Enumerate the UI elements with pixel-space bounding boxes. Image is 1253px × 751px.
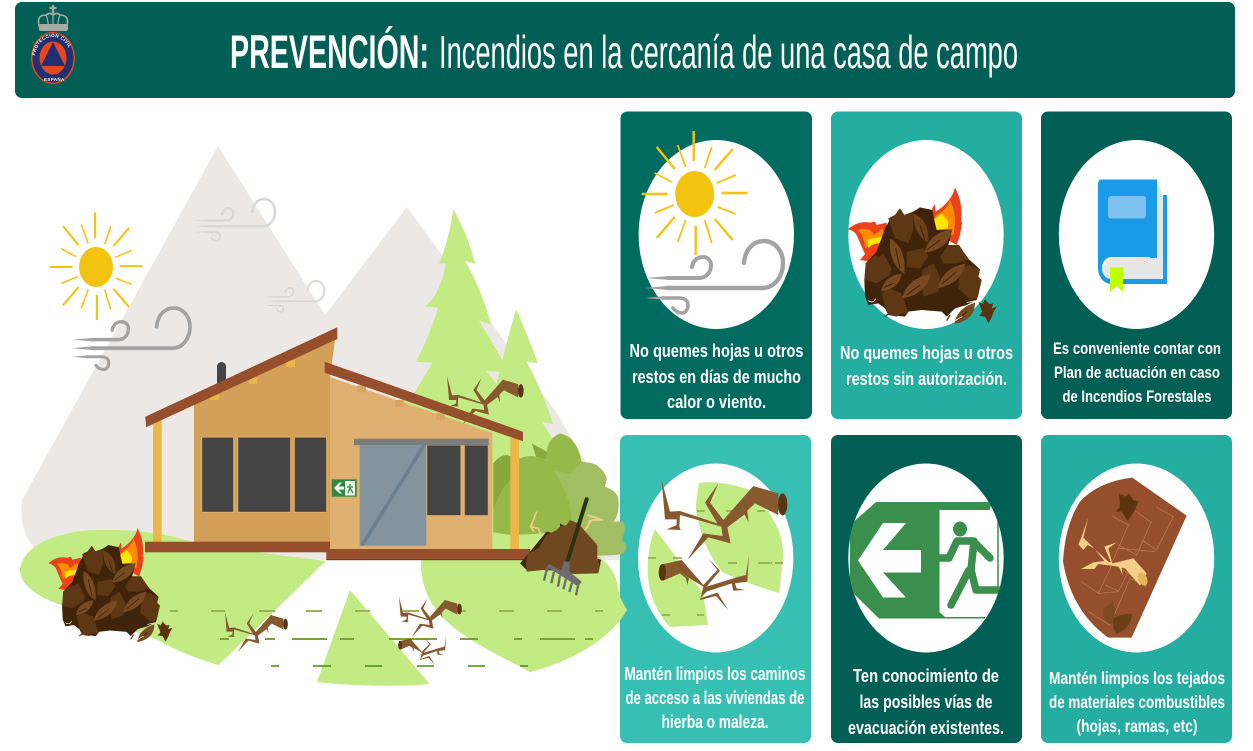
scene: country house illustration [20,146,627,686]
branches on roof [447,376,524,425]
icon: sun [642,131,748,255]
compost pile with rake [520,499,603,595]
text: (hojas, ramas, etc) [1076,716,1198,736]
logo: Protección Civil España [31,5,75,84]
text [1053,339,1221,406]
icon: exit sign [850,502,998,618]
card 6: clean roofs [1041,435,1232,743]
trees [400,209,560,545]
mountains [21,146,620,560]
text: Ten conocimiento de [853,665,999,686]
text: restos sin autorización. [846,368,1007,389]
icon: wind [645,241,783,313]
text [840,342,1013,389]
icon: faint wind left [195,199,275,241]
text: las posibles vías de [860,691,992,712]
icon: faint wind right [265,281,324,312]
icon: sun [50,212,142,320]
header banner [15,2,1235,98]
icon: branches [659,480,787,610]
branches on path left [225,612,288,652]
text [624,663,806,732]
logo: Protección Civil España: ESPAÑA [44,76,65,82]
branches on path right bottom [398,636,446,665]
title: PREVENCIÓN: [230,25,429,78]
ground: grass [20,530,627,686]
bushes [493,433,626,557]
path dashes [170,611,603,666]
text: de Incendios Forestales [1062,387,1212,406]
house [145,327,530,560]
text: restos en días de mucho [632,366,801,387]
title [230,25,1018,78]
icon: roof with debris [1063,478,1187,638]
text [1049,668,1225,736]
branches on path right top [399,597,462,637]
grass patches [648,482,783,627]
logo: Protección Civil España: PROTECCION CIVIL [32,34,71,56]
card 2: burning leaves [831,112,1022,419]
text: Mantén limpios los caminos [624,663,806,684]
icon: burning leaf pile [848,187,997,324]
icon: book [1098,180,1167,292]
icon: strong wind [72,308,190,370]
text: hierba o maleza. [662,711,768,732]
text [630,340,804,412]
card 4: clean paths [620,435,811,743]
text: No quemes hojas u otros [630,340,804,361]
exit sign on wall [332,479,357,497]
text: No quemes hojas u otros [840,342,1013,363]
card 3: plan book [1041,112,1232,419]
text [848,665,1004,738]
text: evacuación existentes. [848,717,1004,738]
card 1: sun and wind [620,112,812,419]
text: de acceso a las viviendas de [626,687,804,708]
text: calor o viento. [667,391,766,412]
card 5: evacuation sign [831,435,1022,743]
burning leaf pile [48,528,172,642]
